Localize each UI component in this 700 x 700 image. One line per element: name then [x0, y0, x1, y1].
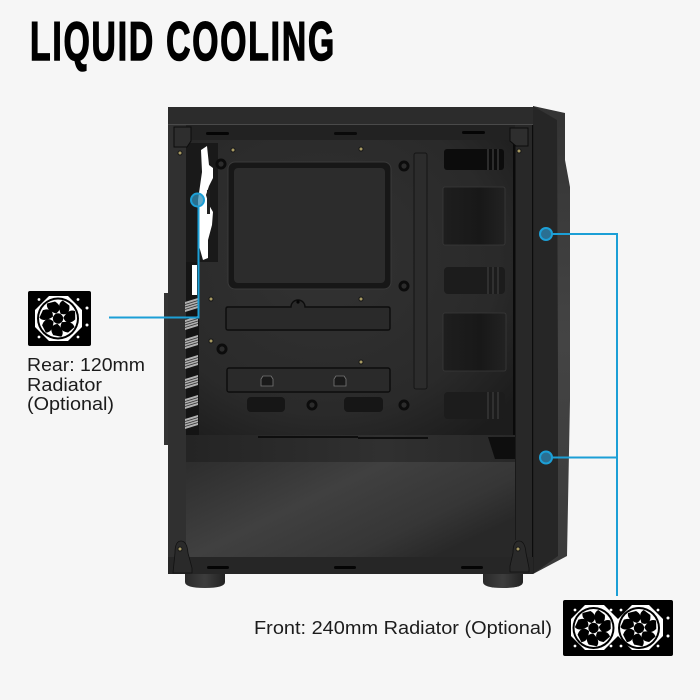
bottom bar: [168, 557, 533, 574]
lower expansion cutout with clips: [227, 368, 390, 392]
left rear panel edge: [164, 293, 170, 445]
marker: rear fan: [191, 194, 204, 206]
connector: rear radiator: [109, 194, 204, 318]
rear vent slots: [185, 298, 198, 429]
label: rear radiator: Rear: 120mm: [27, 355, 145, 375]
rear fan opening: [186, 143, 218, 447]
connector: front radiator: [540, 228, 617, 596]
left rail: [168, 125, 186, 574]
upper expansion cutout: [226, 300, 390, 330]
front side rim: [533, 106, 570, 574]
right rail: [513, 125, 533, 574]
drive bays: [443, 149, 506, 419]
corner brackets: [173, 127, 529, 573]
marker: lower front: [540, 452, 552, 464]
CPU cutout: [228, 162, 391, 289]
motherboard tray: [186, 140, 515, 436]
marker: upper front: [540, 228, 552, 240]
white rear fan: [198, 146, 213, 260]
case feet: [185, 572, 523, 588]
label: rear radiator: [27, 355, 145, 414]
label: front radiator: Front: 240mm Radiator (Optional): [254, 618, 552, 638]
case frame: [168, 107, 533, 574]
icon: 120mm radiator: [28, 291, 91, 346]
PSU shroud: [186, 462, 515, 557]
cable holes: [247, 397, 383, 412]
vertical tray rib: [414, 153, 427, 389]
case floor: [186, 435, 515, 462]
front panel: [533, 106, 558, 574]
icon: 240mm radiator: [563, 600, 673, 656]
label: rear radiator: Radiator: [27, 375, 102, 395]
PC case: [164, 106, 570, 588]
title: LIQUID COOLING: [30, 10, 336, 72]
standoffs and screws: [208, 146, 410, 410]
top bar: [168, 107, 533, 140]
label: rear radiator: (Optional): [27, 394, 114, 414]
